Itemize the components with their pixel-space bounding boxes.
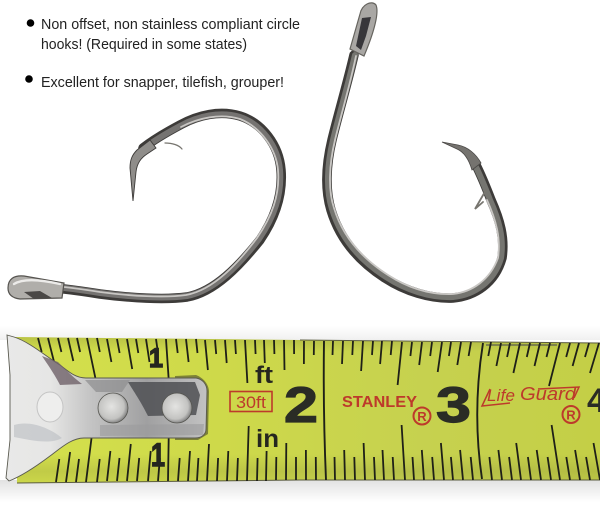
Life Guard brand: Life <box>487 386 515 405</box>
bullet list <box>25 16 300 91</box>
bullet 1: Non offset, non stainless compliant circle <box>41 16 300 33</box>
rivet 3 <box>162 393 192 423</box>
inch lines <box>324 341 483 480</box>
bottom tick marks <box>56 419 600 482</box>
tape measure <box>6 335 600 483</box>
registered mark 1 <box>414 408 430 424</box>
right circle hook <box>327 3 503 298</box>
registered mark 2: R <box>566 408 576 422</box>
Life Guard brand: Guard <box>520 384 577 404</box>
bullet 2: Excellent for snapper, tilefish, grouper! <box>41 74 284 91</box>
ft label: ft <box>255 362 273 389</box>
registered mark 1: R <box>417 409 427 424</box>
30ft badge <box>230 392 272 412</box>
30ft badge: 30ft <box>236 393 266 412</box>
numeral 1 bottom: 1 <box>151 437 165 473</box>
eye <box>350 3 377 56</box>
metal hook clip <box>6 335 209 481</box>
numeral 3: 3 <box>436 377 471 433</box>
STANLEY brand: STANLEY <box>342 394 417 411</box>
Life Guard brand <box>482 384 579 406</box>
in label: in <box>256 425 279 453</box>
shadow above tape <box>0 326 600 340</box>
shadow under tape <box>0 480 600 502</box>
tape body <box>15 337 600 483</box>
dark reflections <box>14 356 204 442</box>
point and barb <box>130 140 182 201</box>
rivet 2 <box>98 393 128 423</box>
eye <box>8 276 64 299</box>
numeral 1 top: 1 <box>149 343 163 373</box>
top tick marks <box>38 338 599 386</box>
registered mark 2 <box>562 406 580 423</box>
bullet 1: hooks! (Required in some states) <box>41 36 247 53</box>
bullet 1 <box>27 16 300 53</box>
left circle hook <box>8 113 281 299</box>
point and barb <box>442 142 486 209</box>
numeral 2: 2 <box>284 377 318 433</box>
rivet 1 <box>37 392 63 422</box>
